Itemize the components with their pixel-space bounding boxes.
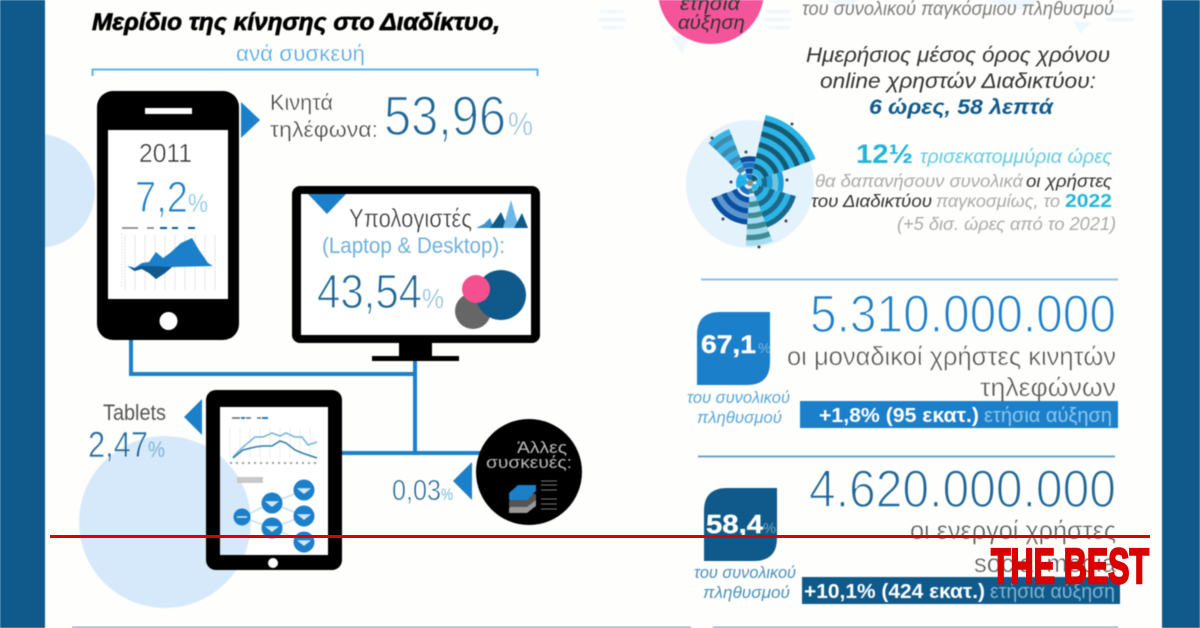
social media description: social media: [974, 548, 1117, 578]
icon: smartphone: [97, 91, 239, 340]
mobile users badge: 67,1: [701, 331, 756, 359]
mobile users badge: %: [758, 340, 771, 357]
watermark rule: [50, 535, 1150, 538]
wedge top right: [683, 116, 817, 250]
background circle: bottom left: [79, 436, 251, 608]
hours text block: 2022: [1065, 191, 1112, 211]
computers label: Υπολογιστές: [349, 203, 472, 233]
hours text block: θα δαπανήσουν συνολικά: [815, 171, 1024, 191]
mobile label: [270, 90, 378, 142]
daily time value: 6 ώρες, 58 λεπτά: [869, 96, 1054, 119]
smartphone share 2011: 7,2: [135, 173, 188, 222]
panel: social media users: [694, 460, 1120, 604]
social media badge caption: πληθυσμού: [703, 583, 790, 602]
smartphone share 2011: %: [188, 188, 208, 218]
mobile users badge caption: πληθυσμού: [697, 408, 782, 427]
tablets value: 2,47: [88, 424, 148, 465]
arrow: tablet: [184, 399, 202, 435]
other devices label: Άλλες: [517, 438, 567, 457]
mobile label: Κινητά: [270, 90, 333, 115]
computers value: %: [422, 283, 444, 314]
panel: mobile users: [687, 285, 1118, 428]
smartphone area chart: [122, 228, 215, 290]
wedge left: [743, 176, 757, 190]
social media badge: 58,4: [706, 509, 764, 539]
daily time text: Ημερήσιος μέσος όρος χρόνου: [806, 44, 1110, 67]
daily time text: online χρηστών Διαδικτύου:: [820, 70, 1096, 93]
background circle: left: [0, 134, 95, 248]
left side bar: [0, 0, 45, 628]
mobile value: %: [508, 106, 533, 142]
arrow: smartphone: [241, 102, 260, 138]
connector lines: [131, 340, 482, 453]
social media badge: [704, 488, 777, 561]
wedge right: [719, 152, 781, 214]
wedge lower left: [711, 144, 789, 222]
tablet line chart: [230, 418, 317, 483]
hours text block: του Διαδικτύου: [811, 191, 932, 211]
other devices value: %: [441, 485, 453, 504]
other devices value: 0,03: [392, 475, 441, 507]
arrow: monitor: [308, 194, 346, 214]
mobile users badge caption: του συνολικού: [687, 388, 790, 407]
wedge top left: [695, 128, 805, 238]
mobile label: τηλέφωνα:: [270, 117, 378, 142]
mobile users description: [787, 341, 1116, 402]
hours text block: οι χρήστες: [1026, 171, 1112, 191]
mobile users description: οι μοναδικοί χρήστες κινητών: [787, 341, 1116, 371]
mobile users growth bar: ετήσια αύξηση: [984, 405, 1112, 427]
mobile users badge caption: [687, 388, 790, 427]
social media description: [910, 515, 1117, 578]
polar chart dots: [710, 122, 794, 248]
tablet node diagram: [234, 480, 314, 552]
hours value: 12½: [856, 139, 913, 169]
callout: pink growth circle: [658, 0, 764, 44]
icon: tablet: [205, 389, 343, 571]
wedge lower right: [705, 138, 795, 228]
right side bar: [1162, 0, 1200, 628]
social media description: οι ενεργοί χρήστες: [910, 515, 1116, 545]
venn circles: [455, 270, 526, 329]
mini peak chart: [476, 200, 528, 228]
tablets value: %: [148, 437, 165, 462]
social media number: 4.620.000.000: [809, 460, 1116, 519]
social media growth bar: ετήσια αύξηση: [990, 581, 1115, 603]
icon: other devices: [476, 419, 582, 525]
social media badge caption: του συνολικού: [694, 563, 796, 582]
mobile value: 53,96: [384, 84, 506, 147]
other devices label: [486, 438, 572, 472]
social media badge: %: [763, 520, 776, 537]
social media growth bar: [802, 577, 1120, 604]
mobile users growth bar: +1,8% (95 εκατ.): [819, 405, 979, 427]
stack icon: [509, 481, 557, 513]
other devices label: συσκευές:: [486, 453, 572, 472]
social media growth bar: +10,1% (424 εκατ.): [804, 581, 985, 603]
decorative faint world map background: [598, 0, 1134, 54]
title: Μερίδιο της κίνησης στο Διαδίκτυο,: [92, 9, 500, 36]
hours text block: τρισεκατομμύρια ώρες: [920, 147, 1113, 168]
section heading: [92, 9, 538, 76]
arrow: other devices: [453, 462, 472, 500]
hours text block: (+5 δισ. ώρες από το 2021): [897, 214, 1116, 234]
bracket: [92, 70, 538, 76]
laptop and desktop label: (Laptop & Desktop):: [322, 233, 505, 258]
callout: pink growth circle: αύξηση: [678, 13, 745, 34]
daily time text: [806, 44, 1110, 119]
smartphone year: 2011: [139, 138, 192, 168]
mobile users description: τηλεφώνων: [980, 372, 1116, 402]
wedge top: [726, 159, 774, 207]
social media badge caption: [694, 563, 796, 602]
mobile users badge: [697, 312, 771, 385]
hours text block: παγκοσμίως, το: [936, 191, 1060, 211]
polar chart: [683, 116, 817, 250]
hours text block: [811, 139, 1116, 234]
computers value: 43,54: [317, 266, 422, 319]
icon: desktop monitor: [292, 186, 540, 361]
mobile users growth bar: [800, 401, 1118, 428]
wedge bottom: [690, 123, 810, 243]
tablets label: Tablets: [103, 400, 166, 425]
subtitle: ανά συσκευή: [236, 41, 365, 66]
mobile users number: 5.310.000.000: [810, 285, 1116, 344]
